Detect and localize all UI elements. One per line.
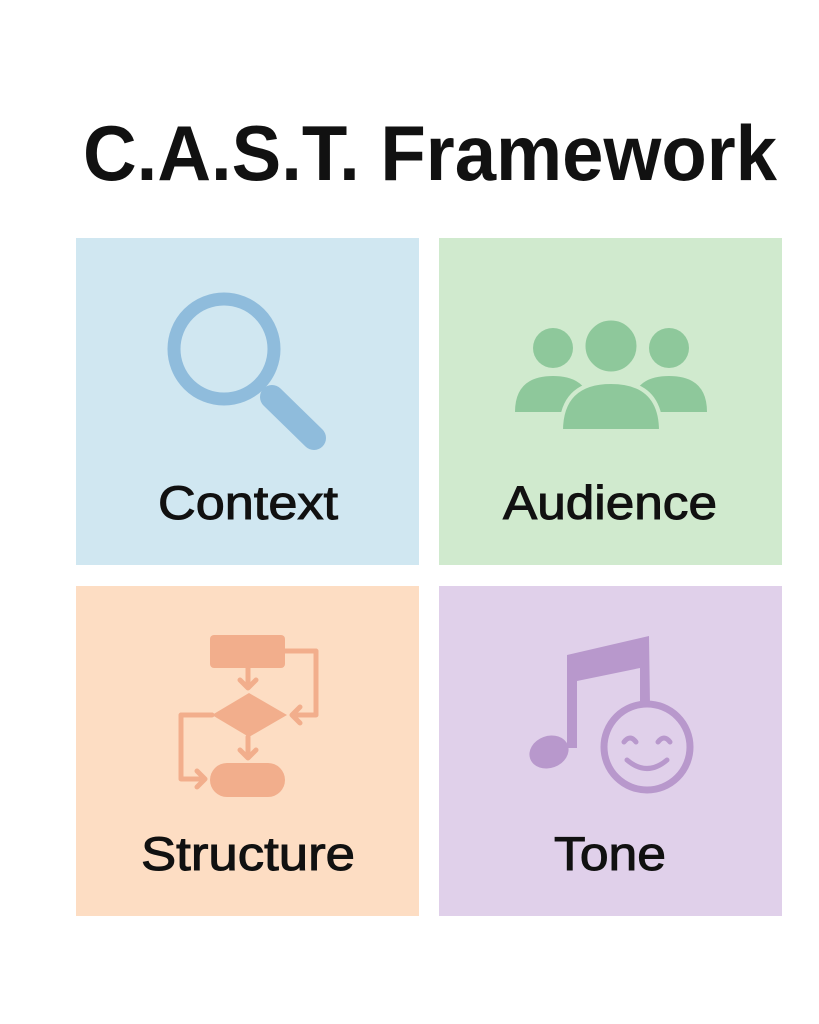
panel: structure	[76, 586, 419, 916]
panel: context	[76, 238, 419, 565]
label: structure: Structure	[141, 827, 355, 880]
icon: flowchart	[181, 635, 316, 797]
panel: audience	[439, 238, 782, 565]
icon: note with smiley	[525, 636, 690, 790]
icon: magnifier	[174, 299, 314, 438]
label: audience: Audience	[503, 476, 717, 529]
icon: people	[515, 319, 707, 431]
label: context: Context	[158, 476, 338, 529]
label: tone: Tone	[554, 827, 666, 880]
title: C.A.S.T. Framework	[83, 109, 778, 197]
panel: tone	[439, 586, 782, 916]
